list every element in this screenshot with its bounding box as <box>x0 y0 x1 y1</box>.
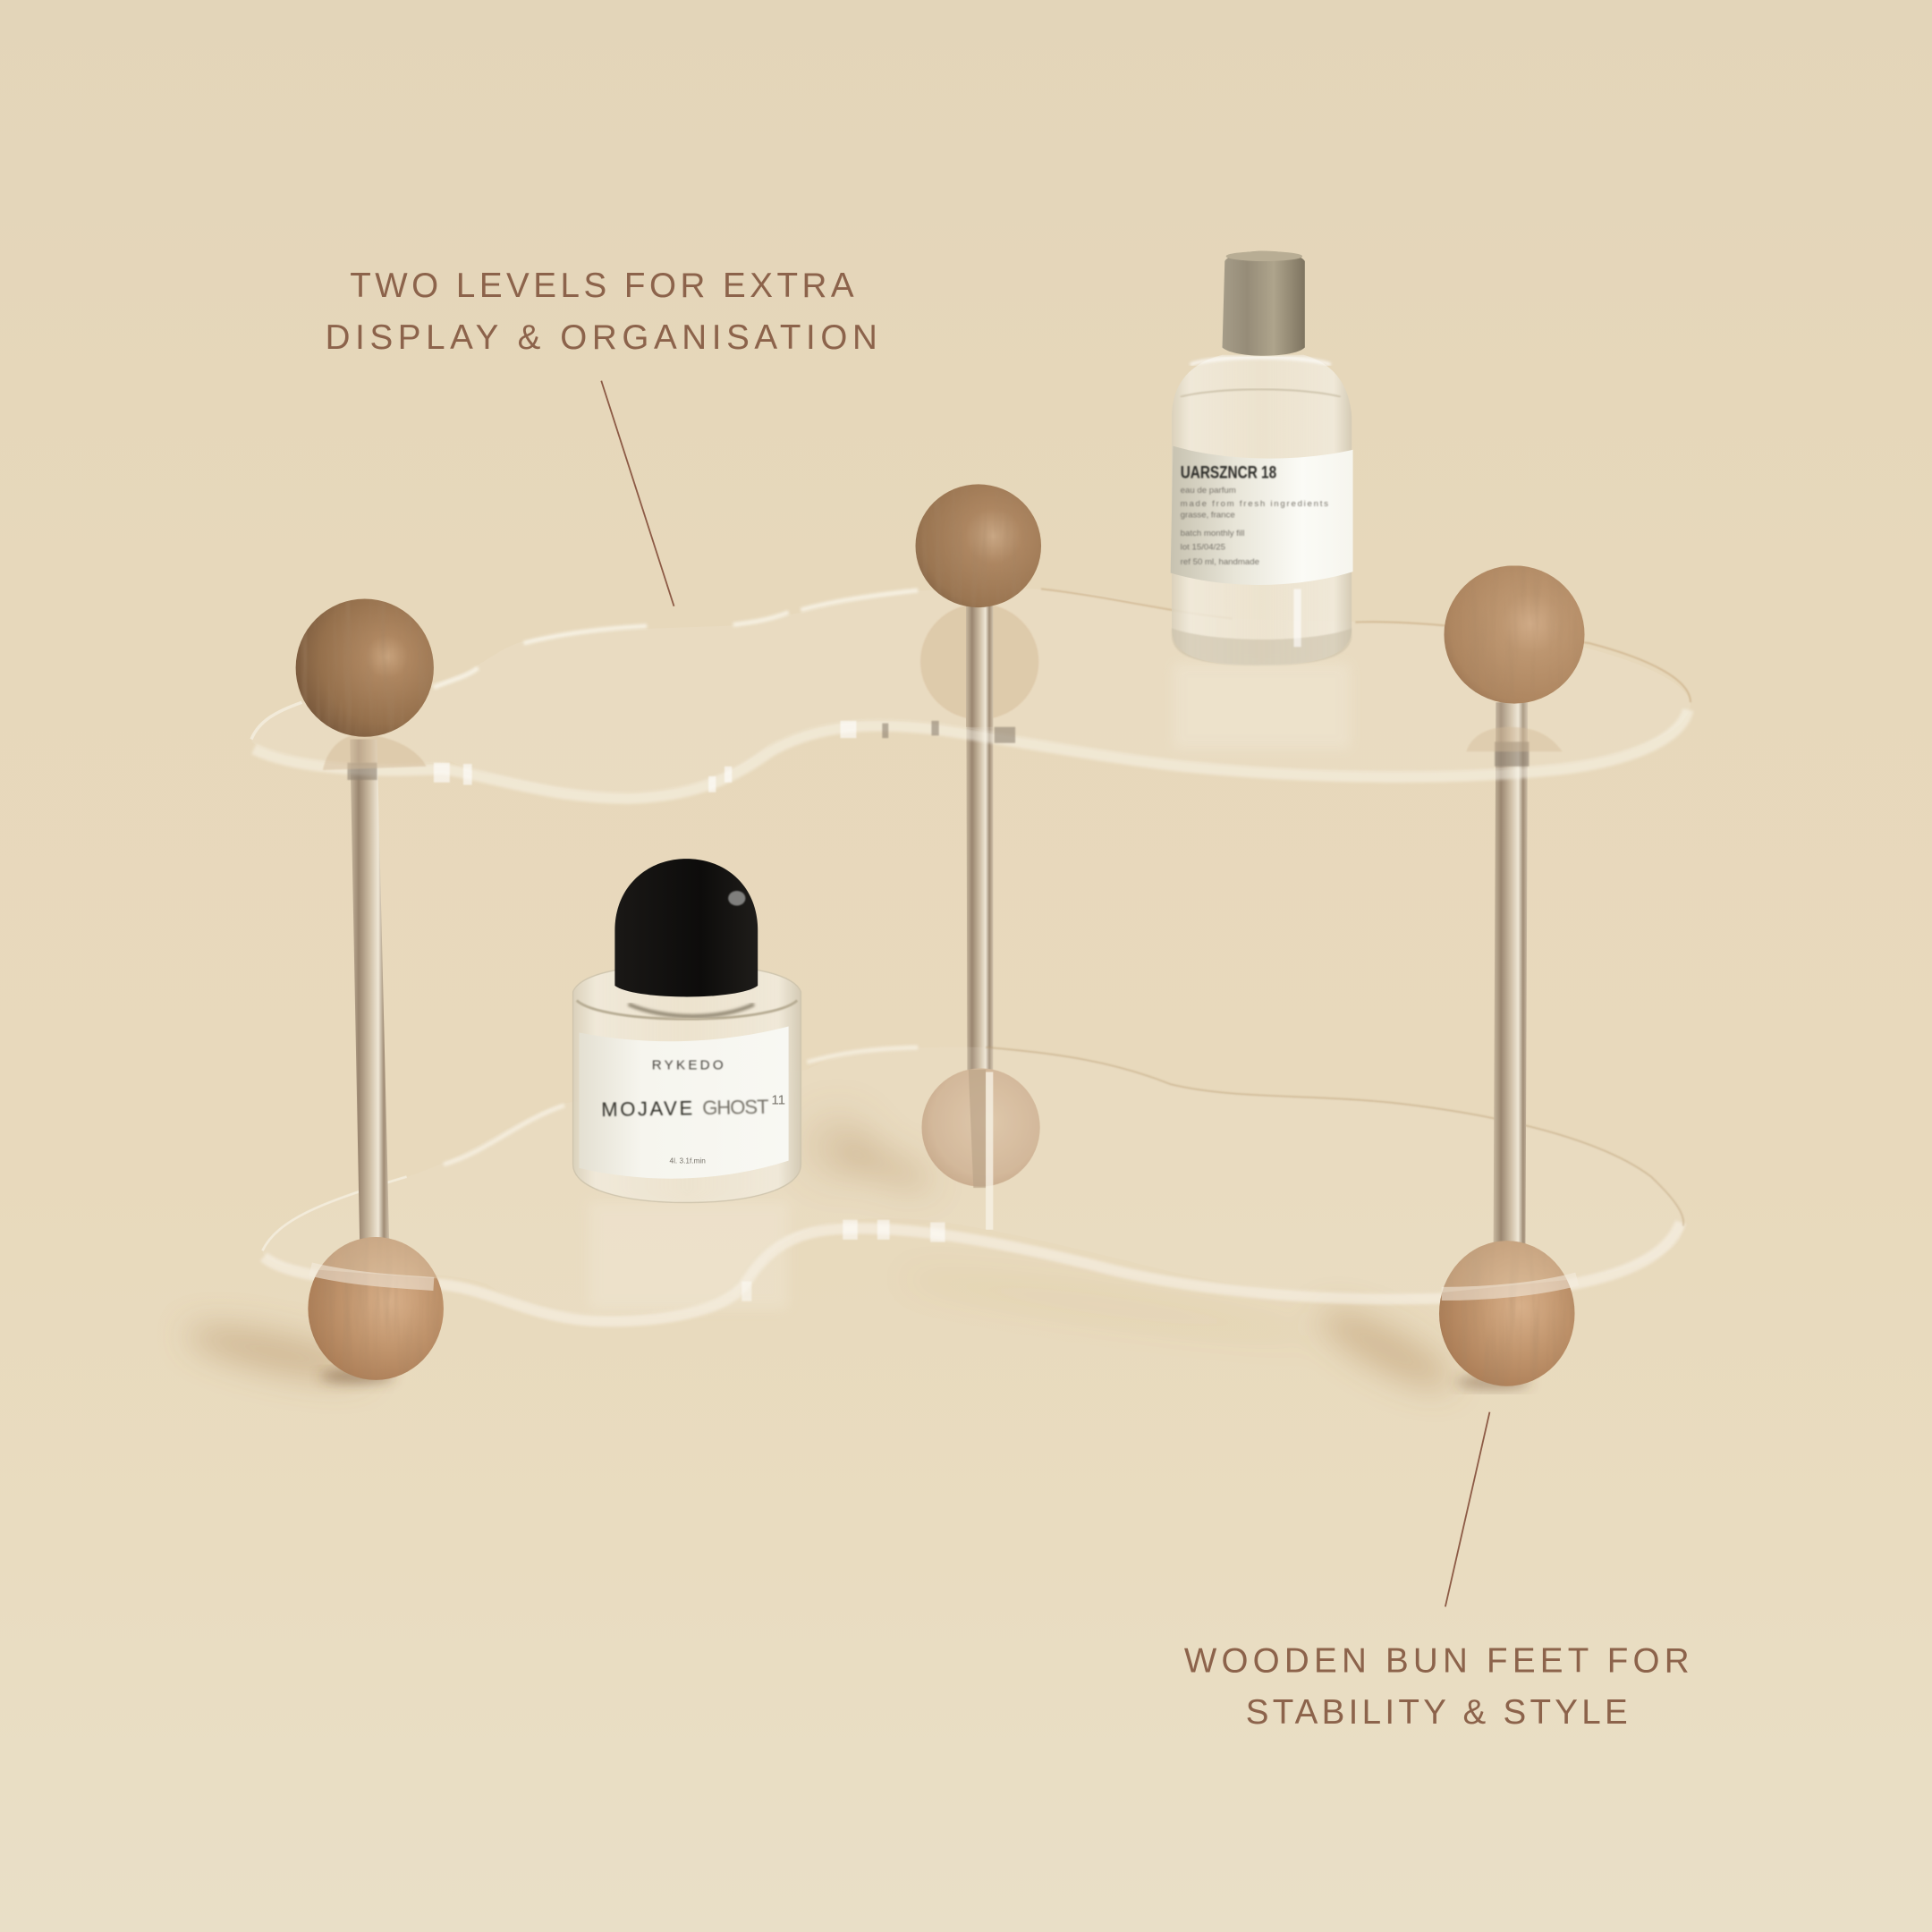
glass body <box>573 965 801 1202</box>
bright refraction line <box>986 1072 993 1230</box>
reflected ball under top middle <box>920 604 1038 719</box>
upper acrylic shelf <box>251 588 1690 799</box>
bottle reflection in upper shelf <box>1173 663 1351 750</box>
callout: wooden bun feet <box>1184 1412 1690 1732</box>
feet seen through shelf <box>319 1237 1567 1292</box>
glass collar <box>577 1001 797 1019</box>
upper left reflection <box>323 734 427 770</box>
bottle: Byredo Mojave Ghost <box>573 859 801 1309</box>
label small print: eau de parfum <box>1181 486 1236 496</box>
number mark: 11 <box>771 1092 785 1107</box>
rod segment over reflection <box>966 604 993 727</box>
label small print: lot 15/04/25 <box>1181 542 1225 552</box>
cap top <box>1226 251 1302 261</box>
label small print: grasse, france <box>1181 511 1235 521</box>
upper shelf rear outline <box>1041 589 1690 702</box>
volume text: 4l. 3.1f.min <box>669 1157 706 1165</box>
floor shadows <box>183 1109 1462 1402</box>
callout text line 2: STABILITY & STYLE <box>1246 1693 1628 1732</box>
front rods <box>350 702 1528 1254</box>
lower shelf left outline <box>262 1177 407 1250</box>
label small print: ref 50 ml, handmade <box>1181 557 1259 567</box>
collar shadow <box>629 1004 754 1016</box>
label small print: made from fresh ingredients <box>1181 499 1328 509</box>
lower middle ball <box>921 1068 1040 1187</box>
glass highlight streak <box>1293 589 1301 647</box>
shelf rear outline <box>986 1047 1683 1226</box>
callout: two levels <box>326 267 877 606</box>
metal cap <box>1223 251 1305 356</box>
callout leader line <box>601 381 674 606</box>
shelf rear highlights <box>444 1047 918 1165</box>
right rod <box>1494 702 1528 1254</box>
shelf front edge <box>264 1223 1681 1321</box>
bottle base <box>1172 629 1352 665</box>
upper shelf left outline <box>251 702 302 740</box>
label small print <box>1181 486 1328 567</box>
bottom left wooden foot <box>308 1237 444 1380</box>
edge glints <box>434 721 856 792</box>
rod seen through ball <box>969 1070 986 1188</box>
cap highlight <box>728 891 745 905</box>
label small print: batch monthly fill <box>1181 529 1244 538</box>
name word one: MOJAVE <box>601 1097 692 1121</box>
white label <box>579 1027 789 1179</box>
shoulder glints <box>1191 357 1331 365</box>
lower shelf edge over feet <box>310 1269 1577 1293</box>
foot contact shadows <box>320 1370 1530 1388</box>
left rod <box>350 740 389 1247</box>
top right wooden ball <box>1444 565 1585 704</box>
white label <box>1171 446 1353 585</box>
callout leader line <box>1445 1412 1489 1606</box>
upper shelf rear highlights <box>434 590 918 688</box>
upper shelf front edge <box>254 709 1688 799</box>
lower edge glints <box>741 1220 945 1301</box>
product name <box>601 1096 769 1121</box>
brand text: RYKEDO <box>652 1058 724 1073</box>
black dome cap <box>614 859 758 996</box>
middle rod <box>966 601 993 1074</box>
upper right reflection <box>1466 727 1563 751</box>
callout text line 1: WOODEN BUN FEET FOR <box>1184 1641 1690 1680</box>
back rod and lower middle ball <box>921 601 1040 1230</box>
name word two: GHOST <box>702 1096 769 1119</box>
bottle on the upper shelf <box>1171 251 1353 665</box>
bottom right wooden foot <box>1439 1241 1575 1386</box>
label title: UARSZNCR 18 <box>1181 463 1276 482</box>
top left wooden ball <box>296 598 434 737</box>
top middle wooden ball <box>916 484 1041 607</box>
liquid surface <box>1181 389 1341 397</box>
callout text line 2: DISPLAY & ORGANISATION <box>326 318 877 357</box>
lower acrylic shelf <box>262 1046 1683 1321</box>
callout text line 1: TWO LEVELS FOR EXTRA <box>350 267 854 305</box>
bottle reflection <box>589 1201 789 1309</box>
glass body <box>1172 355 1352 665</box>
